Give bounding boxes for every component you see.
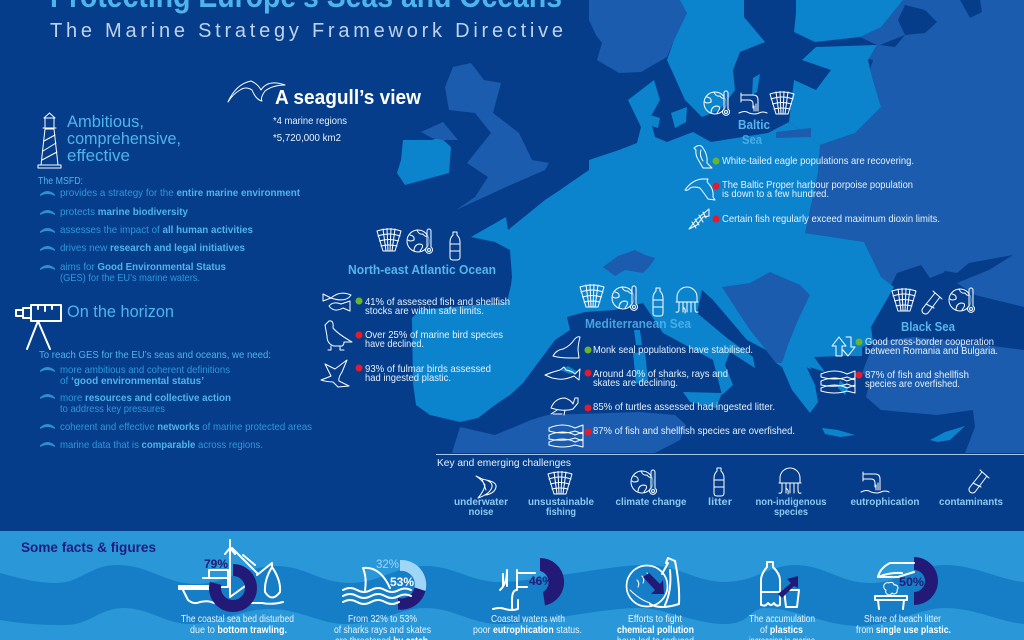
fact: chemical pollution: chemical pollution (617, 625, 694, 636)
panel: mediterranean sea: Mediterranean Sea (585, 316, 692, 331)
panel: north-east atlantic ocean: stocks are within safe limits. (365, 306, 484, 317)
title: The Marine Strategy Framework Directive (50, 20, 563, 42)
horizon list: more resources and collective action (60, 393, 231, 404)
icon: seagull (228, 81, 285, 102)
fact: plastics accumulation (749, 562, 815, 640)
panel: mediterranean sea: Around 40% of sharks, rays and (593, 369, 728, 380)
heading: some facts and figures: Some facts & figures (21, 539, 156, 555)
fact: sharks rays and skates: of sharks rays and skates (334, 625, 431, 636)
panel: baltic sea: White-tailed eagle populations are recovering. (722, 156, 914, 167)
panel: key and emerging challenges: litter (708, 497, 732, 508)
horizon list: coherent and effective networks of marine protected areas (60, 422, 312, 433)
MSFD list: (GES) for the EU’s marine waters. (60, 273, 200, 284)
heading: on the horizon: On the horizon (67, 302, 174, 321)
panel: baltic sea (685, 91, 940, 229)
icon: monk seal (553, 337, 580, 358)
panel: north-east atlantic ocean: have declined. (365, 339, 424, 350)
panel: black sea: between Romania and Bulgaria. (865, 346, 998, 357)
panel: north-east atlantic ocean: 93% of fulmar birds assessed (365, 364, 491, 375)
panel: key and emerging challenges: noise (468, 507, 494, 518)
icon: turtle (551, 398, 578, 415)
horizon list: to address key pressures (60, 404, 165, 415)
panel: key and emerging challenges: Key and emerging challenges (437, 458, 571, 469)
horizon list (39, 350, 312, 451)
fact: eutrophication: poor eutrophication status. (473, 625, 582, 636)
panel: black sea (821, 288, 998, 393)
title (50, 0, 563, 42)
fact: single use plastic: Share of beach litter (864, 614, 942, 625)
icon: lighthouse (38, 113, 61, 168)
panel: north-east atlantic ocean: 41% of assessed fish and shellfish (365, 297, 510, 308)
icon: marine bird (325, 321, 352, 350)
panel: key and emerging challenges: underwater (454, 497, 508, 508)
panel: black sea: Black Sea (901, 319, 956, 334)
panel: key and emerging challenges: climate change (616, 497, 687, 508)
horizon list: marine data that is comparable across regions. (60, 440, 263, 451)
fact: single use plastic (856, 557, 951, 636)
horizon list: of ‘good environmental status’ (60, 376, 204, 387)
icon: fulmar (321, 360, 349, 387)
fact: sharks rays and skates: 53% (390, 575, 414, 589)
heading: ambitious: comprehensive, (67, 129, 181, 148)
icon: telescope (16, 305, 61, 349)
panel: north-east atlantic ocean: had ingested plastic. (365, 373, 451, 384)
panel: black sea: 87% of fish and shellfish (865, 370, 969, 381)
panel: some facts and figures (0, 531, 1024, 640)
icon: dolphin (685, 179, 715, 200)
panel: north-east atlantic ocean (321, 228, 510, 387)
panel: baltic sea: Baltic (738, 117, 770, 132)
marine regions facts (273, 116, 347, 144)
MSFD list: The MSFD: (38, 176, 83, 187)
panel: north-east atlantic ocean: Over 25% of marine bird species (365, 330, 503, 341)
panel: black sea: Good cross-border cooperation (865, 337, 994, 348)
panel: black sea: species are overfished. (865, 379, 960, 390)
panel: key and emerging challenges: unsustainable (528, 497, 594, 508)
panel: baltic sea: Certain fish regularly exceed maximum dioxin limits. (722, 214, 940, 225)
icon: shark (545, 367, 580, 380)
panel: baltic sea: Sea (742, 132, 763, 147)
fact: chemical pollution: Efforts to fight (628, 614, 682, 625)
map of Europe (397, 0, 1024, 453)
panel: north-east atlantic ocean: North-east Atlantic Ocean (348, 262, 496, 277)
panel: key and emerging challenges: non-indigenous (756, 497, 827, 508)
panel: mediterranean sea: skates are declining. (593, 378, 678, 389)
panel: baltic sea: The Baltic Proper harbour porpoise population (722, 180, 913, 191)
MSFD list: protects marine biodiversity (60, 207, 188, 218)
icon: cooperation arrows (832, 337, 855, 356)
icon: fish pair (323, 293, 351, 311)
fact: single use plastic: 50% (899, 575, 924, 589)
fact: eutrophication: 46% (529, 574, 553, 588)
MSFD list: assesses the impact of all human activities (60, 225, 253, 236)
horizon list: more ambitious and coherent definitions (60, 365, 230, 376)
MSFD list: provides a strategy for the entire marine environment (60, 188, 301, 199)
panel: mediterranean sea: 85% of turtles assessed had ingested litter. (593, 402, 775, 413)
heading: ambitious: Ambitious, (67, 112, 144, 131)
panel: key and emerging challenges: fishing (546, 507, 576, 518)
fact: bottom trawling: due to bottom trawling. (190, 625, 287, 636)
marine regions facts: *5,720,000 km2 (273, 133, 341, 144)
heading: ambitious: effective (67, 146, 130, 165)
heading: ambitious (67, 112, 181, 165)
panel: baltic sea: is down to a few hundred. (722, 189, 829, 200)
fact: sharks rays and skates (334, 557, 431, 640)
fact: chemical pollution (617, 558, 694, 640)
horizon list: To reach GES for the EU’s seas and oceans, we need: (39, 350, 271, 361)
fact: bottom trawling (178, 540, 294, 636)
panel: key and emerging challenges: contaminants (939, 497, 1003, 508)
fact: bottom trawling: 79% (204, 557, 228, 571)
marine regions facts: *4 marine regions (273, 116, 347, 127)
heading: a seagull's view: A seagull’s view (275, 87, 421, 109)
MSFD list: drives new research and legal initiatives (60, 243, 245, 254)
panel: key and emerging challenges: eutrophication (850, 497, 920, 508)
fact: bottom trawling: The coastal sea bed disturbed (181, 614, 294, 625)
panel: key and emerging challenges (0, 454, 1024, 531)
fact: plastics accumulation: The accumulation (749, 614, 815, 625)
MSFD list: aims for Good Environmental Status (60, 262, 226, 273)
icon: eagle (694, 146, 712, 168)
icon: underwater noise (476, 476, 496, 498)
icon: fish bone (689, 209, 709, 229)
fact: eutrophication: Coastal waters with (491, 614, 565, 625)
fact: sharks rays and skates: 32% (376, 557, 399, 571)
MSFD list (38, 176, 301, 284)
fact: plastics accumulation: of plastics (760, 625, 803, 636)
fact: eutrophication (473, 558, 582, 636)
panel: key and emerging challenges: species (774, 507, 808, 518)
fact: single use plastic: from single use plastic. (856, 625, 951, 636)
panel: mediterranean sea: Monk seal populations have stabilised. (593, 345, 753, 356)
fact: sharks rays and skates: From 32% to 53% (348, 614, 417, 625)
panel: mediterranean sea (545, 284, 795, 447)
panel: mediterranean sea: 87% of fish and shellfish species are overfished. (593, 426, 795, 437)
